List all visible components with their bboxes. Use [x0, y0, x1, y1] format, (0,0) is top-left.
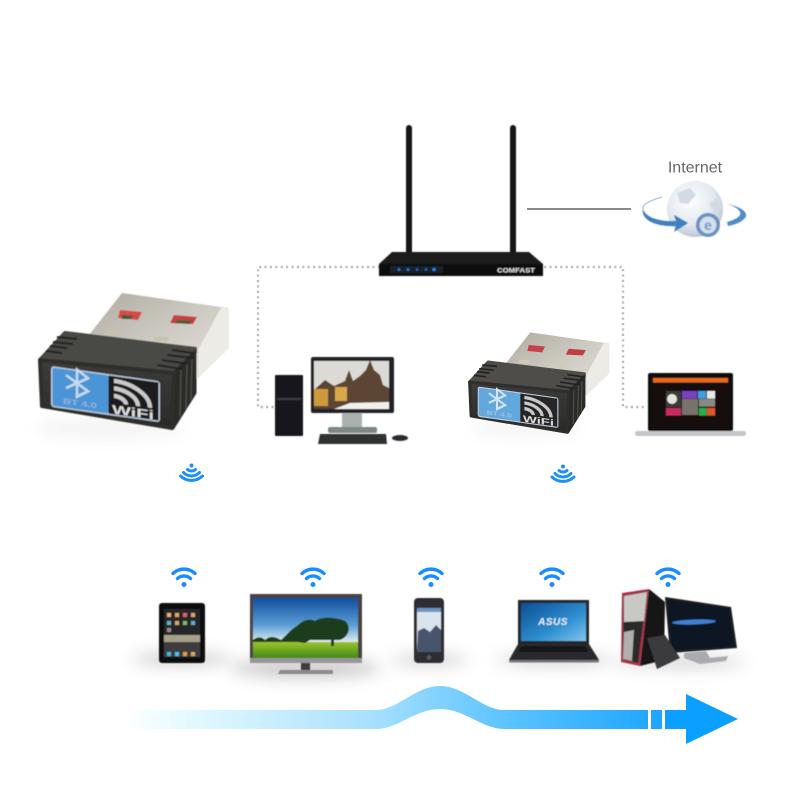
wifi icon: television	[302, 569, 324, 587]
label border	[478, 386, 558, 428]
monitor screen	[668, 600, 734, 650]
router	[379, 125, 543, 276]
plug slot inner left	[122, 315, 134, 319]
device floor shadows	[132, 653, 745, 678]
plug slot right	[170, 315, 197, 324]
phone screen	[417, 608, 441, 652]
phone body	[414, 598, 444, 663]
wifi panel	[520, 394, 557, 427]
monitor frame	[311, 357, 394, 413]
wifi panel	[108, 376, 158, 421]
shell top	[40, 333, 195, 372]
tablet screen	[164, 609, 200, 657]
plug slot left	[118, 310, 142, 320]
globe	[667, 181, 723, 237]
arrow head	[665, 694, 738, 744]
screen light streak	[672, 619, 716, 625]
phone home button	[427, 655, 431, 660]
label border	[51, 366, 160, 422]
browser badge: e	[704, 217, 712, 233]
globe continents	[677, 188, 722, 213]
router brand: COMFAST	[497, 268, 535, 274]
mouse	[392, 435, 408, 441]
shell front	[40, 360, 174, 428]
laptop lid	[518, 600, 589, 644]
red seam	[507, 364, 586, 375]
adapter label	[478, 386, 558, 429]
tv grass	[253, 642, 358, 658]
wifi icon: laptop	[541, 569, 563, 587]
laptop lid	[648, 373, 733, 431]
tv sky	[253, 598, 358, 658]
right metal side	[587, 342, 609, 395]
phone header	[417, 608, 441, 612]
router status lights	[390, 266, 443, 273]
plug contact right	[154, 337, 168, 341]
tablet app icons	[167, 613, 195, 656]
monitor stand	[684, 651, 728, 664]
plug contact left	[107, 330, 120, 335]
tower front	[621, 589, 649, 666]
wifi icon: phone	[420, 569, 442, 587]
small USB adapter	[470, 332, 609, 432]
tv stand neck	[301, 663, 310, 670]
red seam	[90, 335, 197, 350]
keyboard	[647, 635, 680, 669]
tv frame	[250, 594, 362, 663]
tower side	[640, 589, 665, 666]
wifi arcs	[114, 381, 150, 408]
USB metal plug	[85, 293, 229, 378]
ochre facades	[314, 389, 328, 406]
bluetooth symbol	[66, 368, 88, 398]
keyboard	[318, 434, 387, 444]
plug contact right	[554, 365, 564, 368]
wifi arcs	[524, 397, 551, 417]
desktop workstation	[621, 589, 737, 669]
tablet horizon	[164, 635, 200, 642]
adapter label	[51, 366, 160, 423]
dongle reflections	[35, 416, 580, 440]
arrow segment	[651, 710, 662, 729]
broadcast icon left	[180, 464, 202, 480]
monitor base	[328, 427, 377, 433]
broadcast icon right	[552, 464, 574, 481]
laptop deck	[509, 644, 599, 660]
tower light panel	[624, 592, 647, 622]
BT label: BT 4.0	[63, 397, 98, 411]
router body top	[379, 252, 543, 264]
tower panel	[623, 592, 647, 663]
orbit right	[727, 204, 746, 226]
top right grooves	[157, 350, 193, 369]
laptop screen	[521, 603, 586, 641]
left antenna	[406, 125, 412, 255]
BT label: BT 4.0	[487, 410, 513, 420]
top left grooves	[474, 365, 497, 377]
laptop keyboard	[518, 646, 589, 652]
television	[250, 594, 362, 674]
city buildings	[314, 360, 389, 409]
plug slot right	[566, 349, 586, 355]
wavy band	[125, 686, 648, 729]
plug slot inner right	[174, 320, 192, 324]
orange title bar	[653, 378, 728, 382]
laptop screen glow	[651, 376, 730, 429]
asus laptop	[509, 600, 599, 662]
tablet	[159, 603, 205, 663]
dotted connection lines	[258, 267, 646, 407]
tower bay	[277, 398, 301, 400]
shell top	[470, 362, 584, 391]
USB metal plug	[503, 332, 609, 395]
bluetooth panel	[479, 388, 520, 422]
smartphone	[414, 598, 444, 663]
laptop front edge	[509, 660, 599, 662]
top left grooves	[46, 337, 77, 353]
tablet dock	[164, 642, 200, 657]
large USB adapter	[40, 293, 229, 428]
plug slot left	[527, 345, 545, 352]
wifi text: WiFi	[112, 403, 154, 422]
ochre facade middle	[335, 387, 347, 401]
right metal side	[198, 306, 229, 378]
macbook laptop	[635, 373, 746, 436]
desktop computer	[275, 357, 408, 444]
plug contact left	[519, 360, 529, 364]
router front	[379, 264, 543, 276]
monitor stand	[342, 413, 362, 427]
asus logo: ASUS	[537, 617, 568, 628]
side grooves	[180, 359, 192, 417]
orbit arrow	[643, 208, 688, 232]
orbit back	[643, 197, 662, 209]
tv trees	[253, 618, 349, 646]
top right grooves	[556, 375, 583, 389]
tv stand base	[278, 670, 333, 674]
monitor screen	[314, 361, 389, 409]
right antenna	[510, 125, 516, 255]
tower lower panel	[623, 630, 634, 661]
phone article photo	[417, 625, 441, 652]
app tiles	[666, 391, 715, 416]
internet globe group	[643, 160, 746, 237]
internet connection line	[527, 208, 631, 210]
wifi text: WiFi	[523, 414, 554, 428]
shell front	[470, 382, 569, 432]
shell right side	[568, 376, 584, 432]
tablet body	[159, 603, 205, 663]
bluetooth panel	[52, 368, 108, 414]
internet label: Internet	[668, 160, 723, 176]
bluetooth symbol	[489, 388, 505, 410]
laptop base	[635, 431, 746, 436]
tv bezel bottom	[250, 658, 362, 663]
shell right side	[173, 352, 195, 428]
flow arrow	[125, 686, 738, 744]
side grooves	[573, 381, 582, 424]
snowy ground	[334, 402, 389, 409]
wifi icon: tablet	[173, 569, 195, 587]
wifi icon: desktop	[657, 569, 679, 587]
tower	[275, 375, 303, 436]
monitor	[665, 597, 737, 653]
